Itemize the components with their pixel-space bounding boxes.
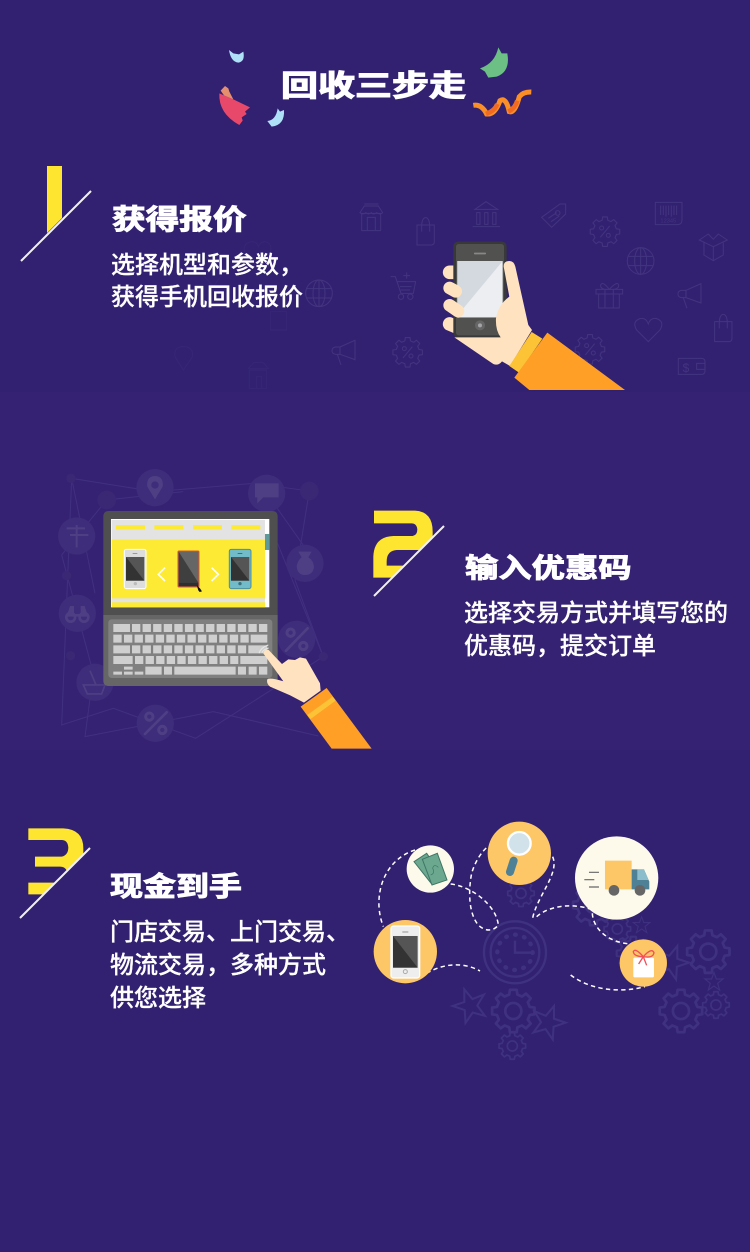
cuff: [509, 332, 542, 373]
white phone: [124, 549, 146, 589]
icon: magnifier: [488, 822, 551, 885]
step 2 text: [464, 600, 728, 660]
laptop: [103, 511, 278, 686]
step number 3: [28, 828, 83, 894]
icon: smartphone: [374, 920, 437, 983]
laptop base: [103, 615, 278, 686]
back fingers: [450, 272, 460, 328]
centre phone: [178, 551, 202, 592]
title: 回收三步走: [281, 70, 466, 103]
step 1 background icons: $: [683, 361, 690, 375]
step 1 hand holding phone: [450, 242, 625, 390]
step 2 divider: [374, 526, 444, 596]
title confetti: [219, 47, 531, 127]
dashed route lines: [379, 847, 645, 990]
step 1 background icons: 12345: [660, 219, 676, 225]
step 3 text: 物流交易，多种方式: [110, 952, 326, 979]
step 1 text: 选择机型和参数，: [111, 252, 303, 279]
step 3 text: [110, 919, 350, 1012]
phone body: [453, 242, 507, 338]
sleeve: [301, 688, 372, 749]
step 3 background gears and stars: [449, 880, 729, 1059]
step 1 background icons: [306, 202, 732, 375]
step 3 divider: [20, 848, 90, 918]
step 1 heading: 获得报价: [112, 204, 247, 235]
sleeve: [514, 333, 625, 390]
step 2 text: 优惠码，提交订单: [464, 633, 656, 660]
step 2 pointing hand: [259, 645, 372, 749]
step 3 heading: 现金到手: [110, 872, 242, 902]
icon: gift: [620, 939, 667, 987]
step 3 text: 供您选择: [110, 985, 206, 1012]
step 1 divider: [21, 191, 91, 261]
icon: delivery truck: [575, 836, 658, 920]
step 1 faint icons behind text: [175, 242, 287, 388]
keyboard keys: [113, 624, 267, 675]
teal phone: [229, 549, 251, 589]
clock: [484, 921, 546, 983]
step number 2: [373, 511, 433, 578]
step number 1: [47, 166, 62, 233]
step 2 heading: 输入优惠码: [465, 553, 632, 584]
front fingers: [450, 288, 458, 311]
palm: [454, 261, 532, 366]
step 3 text: 门店交易、上门交易、: [110, 919, 350, 946]
step 1 text: [111, 252, 303, 311]
icon: cash: [407, 845, 454, 893]
laptop lid: [103, 511, 278, 615]
screen: [111, 519, 269, 607]
step 1 text: 获得手机回收报价: [111, 284, 303, 311]
step 2 background network: [58, 469, 328, 742]
step 2 text: 选择交易方式并填写您的: [464, 600, 728, 627]
